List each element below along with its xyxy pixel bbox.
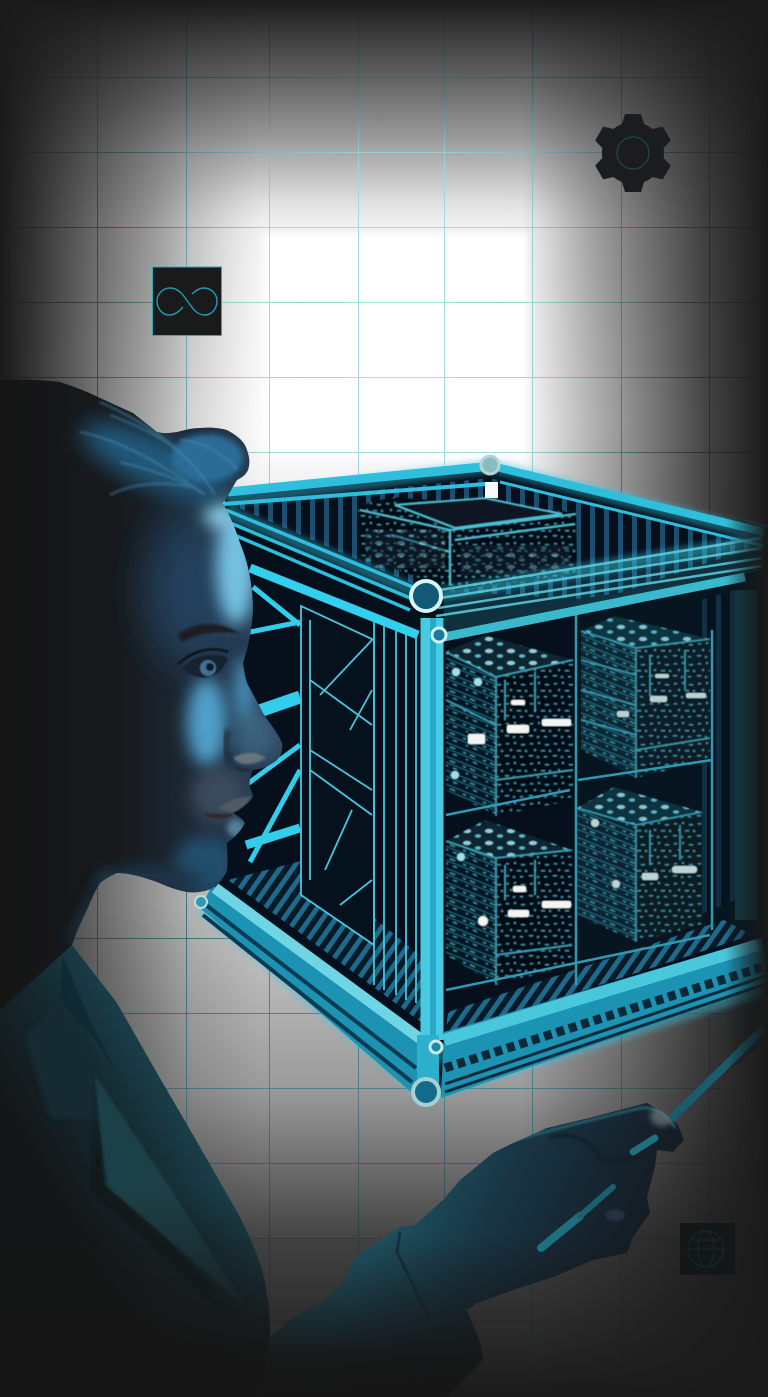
fingertip <box>650 1106 674 1126</box>
icon: globe tile <box>680 1223 735 1275</box>
left bottom node <box>195 896 207 908</box>
bottom left band <box>200 886 422 1092</box>
server unit 2 <box>581 616 710 778</box>
cheek highlight <box>187 678 227 766</box>
woman: coat <box>0 940 280 1397</box>
cube interior <box>215 462 768 1100</box>
woman: arm and hand <box>260 1100 690 1397</box>
top frame rails <box>224 466 764 637</box>
front corner post <box>420 618 444 1040</box>
eye <box>178 649 228 677</box>
bottom right band <box>441 938 768 1098</box>
rear top node <box>481 456 499 498</box>
finger fold <box>550 1135 640 1161</box>
right interior wall <box>575 570 760 980</box>
lower post <box>417 1035 439 1090</box>
arm bottom fade <box>262 1249 556 1397</box>
mouth tone <box>192 767 244 823</box>
server unit 4 <box>577 787 702 942</box>
nostril <box>233 753 266 764</box>
hair sheen <box>72 408 238 516</box>
left floor grating <box>228 860 425 1025</box>
hair tuft <box>171 434 243 482</box>
frame glow <box>201 466 765 1096</box>
lapel <box>95 1078 226 1284</box>
woman: head <box>0 370 290 1010</box>
temple shading <box>147 515 243 665</box>
server rack uprights <box>446 610 712 990</box>
lower fingers <box>605 1209 625 1221</box>
skin base <box>0 370 290 1010</box>
wing of nose <box>226 730 232 764</box>
top corner node <box>411 581 446 642</box>
upper lip <box>218 796 252 813</box>
nose <box>233 711 277 759</box>
right floor grating <box>445 920 752 1036</box>
icon: gear <box>593 114 673 192</box>
forehead highlight <box>216 505 256 625</box>
bottom corner node <box>413 1041 442 1105</box>
inner side panel frames <box>301 606 416 1003</box>
hair strands <box>80 402 238 495</box>
forehead peak <box>204 502 236 528</box>
post core <box>430 618 436 1040</box>
right wall stripes <box>700 590 735 915</box>
top server unit <box>358 497 577 590</box>
cuff <box>396 1232 418 1294</box>
left bracing <box>246 587 300 862</box>
neck edge glow <box>74 876 110 945</box>
back wall stripes <box>232 478 760 600</box>
server unit 3 <box>446 820 572 985</box>
lip line <box>205 813 232 818</box>
right post <box>735 590 757 920</box>
right edge fade <box>725 515 768 1075</box>
lapel shadow <box>93 1130 201 1284</box>
eyebrow <box>178 624 240 642</box>
coat bottom fade <box>147 1217 270 1397</box>
shirt collar shadow <box>61 956 112 1064</box>
chin highlight <box>227 819 245 837</box>
server unit 1 <box>446 635 573 816</box>
nose bridge <box>234 658 254 722</box>
knuckle highlights <box>505 1108 675 1143</box>
nostril shadow <box>232 764 266 771</box>
lower face <box>175 837 235 893</box>
pointer stylus <box>541 1030 762 1248</box>
collar <box>28 1027 89 1118</box>
top right translucent band <box>444 535 764 635</box>
icon: infinity tile <box>152 267 222 336</box>
jaw glow <box>95 866 205 894</box>
holographic server cube <box>195 456 768 1105</box>
